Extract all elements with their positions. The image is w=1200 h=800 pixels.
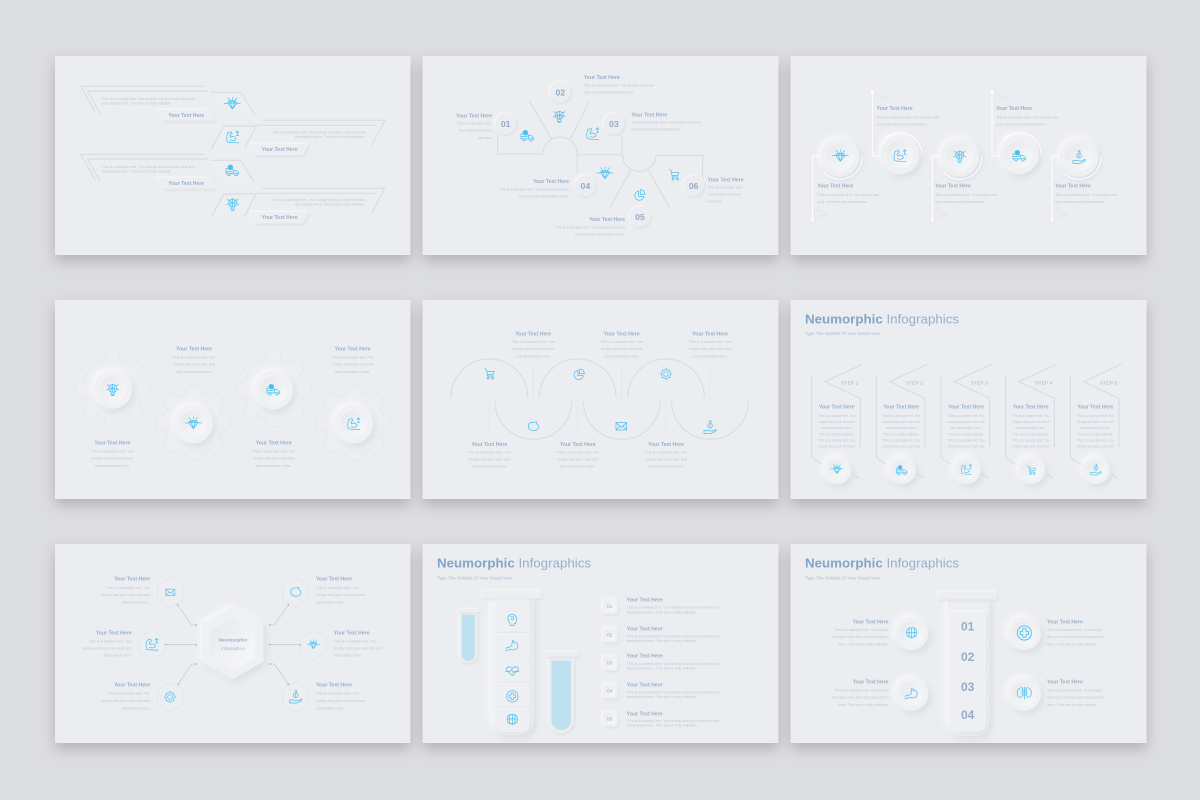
hub text: simply add your own text and bbox=[101, 593, 150, 597]
side text: Your Text Here bbox=[1047, 619, 1083, 625]
wave text: simply add your own text bbox=[469, 457, 511, 461]
card 8 bbox=[422, 544, 778, 743]
hub text: This is a sample text. You bbox=[316, 692, 359, 696]
fan text bbox=[456, 75, 744, 237]
fan text: You simply add your bbox=[708, 193, 742, 197]
centre hexagon: Infographics bbox=[221, 646, 245, 651]
fan text: You simply add your bbox=[458, 129, 493, 133]
list text: This is a sample text. You simply add your own text and bbox=[627, 634, 720, 638]
content 3 bbox=[811, 90, 1117, 221]
step text 3: This is a sample text. You bbox=[947, 439, 985, 443]
card 9 bbox=[790, 544, 1146, 743]
panel: slanted list bbox=[55, 56, 410, 255]
timeline text: This is a sample text. You simply add bbox=[1055, 193, 1117, 197]
wave arcs bbox=[451, 359, 748, 439]
step labels: STEP 4 bbox=[1035, 381, 1053, 387]
step text 2: simply add your own text bbox=[883, 445, 920, 449]
step text 3: Your Text Here bbox=[948, 405, 984, 411]
step text 4: simply add your own text bbox=[1012, 420, 1049, 424]
content 1 bbox=[81, 86, 385, 223]
fan text: own text bbox=[708, 200, 723, 204]
list text: This is a sample text. You simply add your own text and bbox=[627, 690, 720, 694]
wave text: and description here. bbox=[604, 354, 639, 358]
hub text: simply add your own text and bbox=[316, 593, 365, 597]
number boxes bbox=[603, 599, 617, 726]
gear text: This is a sample text. You bbox=[91, 450, 134, 454]
gear text: Your Text Here bbox=[256, 440, 292, 446]
hub text: Your Text Here bbox=[316, 577, 352, 583]
number boxes: 03 bbox=[607, 661, 613, 667]
step text 2: Your Text Here bbox=[883, 405, 919, 411]
badges: 04 bbox=[581, 181, 590, 191]
list text: This is a sample text. You simply add your own text and bbox=[627, 662, 720, 666]
gear shapes bbox=[75, 352, 391, 461]
wave text: Your Text Here bbox=[560, 442, 596, 448]
badges: 05 bbox=[635, 212, 645, 222]
side text: here. This text is fully editable. bbox=[1047, 703, 1098, 707]
fan icons bbox=[521, 111, 679, 200]
step text 5: simply add your own text bbox=[1077, 445, 1114, 449]
side text: here. This text is fully editable. bbox=[838, 703, 889, 707]
fan text: This is a sample text. You simply add your bbox=[584, 83, 655, 87]
fan text: own text and description here. bbox=[575, 233, 625, 237]
step text 4: Your Text Here bbox=[1013, 405, 1049, 411]
heading 8: Neumorphic Infographics bbox=[437, 555, 591, 570]
step text 2: simply add your own text bbox=[883, 420, 920, 424]
panel: gears bbox=[55, 300, 410, 499]
step labels: STEP 3 bbox=[971, 381, 988, 387]
tube with numbers: 03 bbox=[961, 680, 975, 694]
card 4 bbox=[55, 300, 410, 499]
step labels: STEP 2 bbox=[906, 381, 923, 387]
fan text: own text and description here. bbox=[519, 195, 569, 199]
side text bbox=[832, 619, 1104, 707]
badges: 03 bbox=[609, 119, 619, 129]
timeline text bbox=[817, 106, 1117, 204]
step buttons bbox=[824, 457, 1118, 484]
timeline text: This is a sample text. You simply add bbox=[817, 193, 879, 197]
card 3 bbox=[790, 56, 1146, 255]
row 4: Your Text Here bbox=[262, 215, 298, 221]
step text 2: This text is fully editable. bbox=[883, 432, 920, 436]
hub text: simply add your own text and bbox=[83, 646, 132, 650]
step text 5: Your Text Here bbox=[1077, 405, 1113, 411]
wave text: This is a sample text. You bbox=[468, 450, 511, 454]
fan text: Your Text Here bbox=[533, 179, 569, 185]
wave text: Your Text Here bbox=[471, 442, 507, 448]
side text: This is a sample text. You simply bbox=[834, 689, 889, 693]
panel: numbered tube bbox=[790, 544, 1146, 743]
gear text bbox=[91, 346, 374, 468]
badges: 01 bbox=[501, 119, 511, 129]
timeline text: Your Text Here bbox=[817, 184, 853, 190]
hub text: This is a sample text. You bbox=[107, 586, 150, 590]
content 5 bbox=[451, 332, 748, 469]
gear text: simply add your own text bbox=[332, 363, 374, 367]
step labels: STEP 5 bbox=[1100, 381, 1117, 387]
heading 8: Type The Subtitle Of Your Great Here bbox=[437, 575, 512, 580]
list text: description here. This text is fully editable. bbox=[627, 695, 697, 699]
step text 3: and description here. bbox=[950, 426, 982, 430]
list text: Your Text Here bbox=[627, 654, 663, 660]
panel: circle timeline bbox=[790, 56, 1146, 255]
row 1: description here. This text is fully editable. bbox=[102, 102, 172, 106]
hub text: simply add your own text and bbox=[334, 646, 383, 650]
step text 5: This is a sample text. You bbox=[1076, 439, 1114, 443]
timeline text: your own text and description bbox=[935, 200, 984, 204]
side text: add your own text and description bbox=[1047, 635, 1104, 639]
step text 1: This is a sample text. You bbox=[818, 439, 856, 443]
timeline text: This is a sample text. You simply add bbox=[996, 115, 1058, 119]
card 5 bbox=[422, 300, 778, 499]
fan outline bbox=[498, 102, 703, 207]
row 1: Your Text Here bbox=[168, 113, 204, 119]
wave text: simply add your own text bbox=[513, 347, 555, 351]
side text: here. This text is fully editable. bbox=[838, 642, 889, 646]
wave text: This is a sample text. You bbox=[689, 340, 731, 344]
side text: add your own text and description bbox=[832, 635, 889, 639]
hub text: description here. bbox=[334, 654, 362, 658]
step text 3: simply add your own text bbox=[948, 420, 984, 424]
hub text: This is a sample text. You bbox=[89, 639, 132, 643]
card 6 bbox=[790, 300, 1146, 499]
wave text: Your Text Here bbox=[648, 442, 684, 448]
list text: description here. This text is fully editable. bbox=[627, 639, 697, 643]
timeline text: Your Text Here bbox=[877, 106, 913, 112]
centre hexagon bbox=[203, 607, 263, 679]
gear text: simply add your own text bbox=[173, 363, 216, 367]
list text: Your Text Here bbox=[627, 598, 663, 604]
wave text: Your Text Here bbox=[692, 332, 728, 338]
number boxes: 04 bbox=[607, 689, 613, 695]
fan text: This is a sample text bbox=[708, 186, 743, 190]
panel: hexagon hub bbox=[55, 544, 410, 743]
hub text: Your Text Here bbox=[334, 630, 370, 636]
list text: description here. This text is fully editable. bbox=[627, 610, 697, 614]
step text 1: simply add your own text bbox=[818, 445, 855, 449]
row 3: This is a sample text. You simply add your own text and bbox=[102, 165, 195, 169]
timeline text: This is a sample text. You simply add bbox=[935, 193, 997, 197]
wave text: This is a sample text. You bbox=[512, 340, 555, 344]
step text 1: and description here. bbox=[821, 426, 852, 430]
gear text: and description here. bbox=[335, 370, 370, 374]
badges: 06 bbox=[689, 181, 699, 191]
fan text: Your Text Here bbox=[708, 177, 744, 183]
row 3: Your Text Here bbox=[168, 181, 204, 187]
content 6 bbox=[805, 311, 1121, 484]
side text: Your Text Here bbox=[853, 619, 889, 625]
centre hexagon: Neumorphic bbox=[218, 638, 248, 644]
row 1 bbox=[81, 86, 254, 121]
gear text: Your Text Here bbox=[176, 346, 212, 352]
right tube bbox=[545, 652, 579, 733]
side text: This is a sample text. You simply bbox=[1047, 689, 1102, 693]
wave text: and description here. bbox=[692, 354, 728, 358]
number boxes: 01 bbox=[607, 604, 613, 610]
side text: This is a sample text. You simply bbox=[834, 628, 889, 632]
number boxes: 05 bbox=[607, 717, 613, 723]
content 2 bbox=[456, 75, 744, 237]
row 2: This is a sample text. You simply add your own text and bbox=[272, 130, 365, 134]
fan text: own text and description here. bbox=[631, 128, 682, 132]
hub text: This is a sample text. You bbox=[316, 586, 359, 590]
step text 1: This text is fully editable. bbox=[819, 432, 855, 436]
wave text: This is a sample text. You bbox=[645, 450, 687, 454]
hub text: Your Text Here bbox=[96, 630, 132, 636]
timeline text: Your Text Here bbox=[1055, 184, 1091, 190]
row 4: This is a sample text. You simply add your own text and bbox=[272, 198, 365, 202]
side text: add your own text and description bbox=[832, 696, 889, 700]
wave text: simply add your own text bbox=[557, 457, 599, 461]
connector lines bbox=[489, 367, 710, 432]
main tube bbox=[483, 591, 542, 735]
fan text: Your Text Here bbox=[456, 114, 492, 120]
wave text: This is a sample text. You bbox=[600, 340, 643, 344]
panel: wave bbox=[422, 300, 778, 499]
row 2 bbox=[212, 120, 385, 155]
gear text: This is a sample text. You bbox=[173, 356, 215, 360]
side text: here. This text is fully editable. bbox=[1047, 642, 1098, 646]
gear text: and description here. bbox=[95, 464, 130, 468]
wave text: and description here. bbox=[648, 465, 684, 469]
gear buttons bbox=[93, 370, 373, 443]
timeline text: your own text and description bbox=[877, 123, 926, 127]
tube with numbers: 04 bbox=[961, 708, 975, 722]
step text 2: and description here. bbox=[886, 426, 917, 430]
step text 2 bbox=[882, 405, 920, 449]
list text: This is a sample text. You simply add your own text and bbox=[627, 719, 720, 723]
gear text: and description here. bbox=[176, 370, 212, 374]
wave icons bbox=[485, 369, 716, 433]
fan text: Your Text Here bbox=[631, 112, 667, 118]
gear text: Your Text Here bbox=[335, 346, 371, 352]
card 7 bbox=[55, 544, 410, 743]
content 4 bbox=[75, 346, 391, 468]
hub text: This is a sample text. You bbox=[107, 692, 150, 696]
wave text bbox=[468, 332, 732, 469]
connector arrows bbox=[165, 604, 301, 685]
heading 9: Type The Subtitle Of Your Great Here bbox=[805, 575, 880, 580]
fan text: This is a sample text. bbox=[456, 122, 492, 126]
satellite hexagons bbox=[139, 578, 326, 712]
gear text: and description here. bbox=[256, 464, 291, 468]
step labels: STEP 1 bbox=[841, 381, 859, 387]
list text: description here. This text is fully editable. bbox=[627, 667, 697, 671]
badges: 02 bbox=[556, 87, 565, 97]
step text 4: This text is fully editable. bbox=[1013, 432, 1049, 436]
panel: steps bbox=[790, 300, 1146, 499]
step text 5: This is a sample text. You bbox=[1076, 414, 1114, 418]
side text: Your Text Here bbox=[853, 680, 889, 686]
tube with numbers bbox=[938, 592, 997, 736]
step text 4: This is a sample text. You bbox=[1012, 414, 1050, 418]
heading 9: Neumorphic Infographics bbox=[805, 555, 959, 570]
list text: Your Text Here bbox=[627, 711, 663, 717]
hub text: description here. bbox=[122, 706, 150, 710]
number boxes: 02 bbox=[607, 633, 613, 639]
card 1 bbox=[55, 56, 410, 255]
wave text: and description here. bbox=[472, 465, 507, 469]
content 7 bbox=[83, 577, 383, 712]
step text 2: This is a sample text. You bbox=[882, 439, 920, 443]
hub text: description here. bbox=[316, 706, 344, 710]
gear text: This is a sample text. You bbox=[331, 356, 374, 360]
hub text: simply add your own text and bbox=[316, 699, 365, 703]
badges bbox=[495, 82, 704, 227]
wave text: simply add your own text bbox=[645, 457, 688, 461]
wave text: Your Text Here bbox=[604, 332, 640, 338]
hub text: This is a sample text. You bbox=[334, 639, 377, 643]
step columns outlines bbox=[812, 364, 1121, 465]
step text 5 bbox=[1076, 405, 1114, 449]
gear text: simply add your own text bbox=[253, 457, 295, 461]
row 2: Your Text Here bbox=[262, 147, 298, 153]
gear text: Your Text Here bbox=[94, 440, 130, 446]
hub text: description here. bbox=[316, 600, 344, 604]
list text bbox=[627, 598, 720, 728]
step text 5: simply add your own text bbox=[1077, 420, 1114, 424]
list text: This is a sample text. You simply add your own text and bbox=[627, 606, 720, 610]
row 3 bbox=[81, 154, 254, 189]
fan text: This is a sample text. You simply add your bbox=[499, 188, 570, 192]
flag poles bbox=[811, 90, 1067, 221]
timeline text: Your Text Here bbox=[935, 184, 971, 190]
hub text: simply add your own text and bbox=[101, 699, 150, 703]
small left tube bbox=[458, 609, 479, 663]
heading 8 bbox=[437, 555, 591, 580]
hub text: Your Text Here bbox=[114, 577, 150, 583]
hub text bbox=[83, 577, 383, 710]
wave text: and description here. bbox=[560, 465, 595, 469]
list text: Your Text Here bbox=[627, 683, 663, 689]
heading 9 bbox=[805, 555, 959, 580]
step text 4: and description here. bbox=[1015, 426, 1046, 430]
side text: This is a sample text. You simply bbox=[1047, 628, 1102, 632]
timeline text: your own text and description bbox=[996, 123, 1045, 127]
step text 3 bbox=[947, 405, 985, 449]
row 3: description here. This text is fully editable. bbox=[102, 170, 172, 174]
timeline text: This is a sample text. You simply add bbox=[877, 115, 939, 119]
hub text: Your Text Here bbox=[114, 683, 150, 689]
side text: Your Text Here bbox=[1047, 680, 1083, 686]
wave text: simply add your own text bbox=[689, 347, 732, 351]
wave text: Your Text Here bbox=[515, 332, 551, 338]
step text 4: This is a sample text. You bbox=[1012, 439, 1050, 443]
row 4 bbox=[212, 188, 385, 223]
step text 5: This text is fully editable. bbox=[1077, 432, 1114, 436]
timeline text: Your Text Here bbox=[996, 106, 1032, 112]
list text: description here. This text is fully editable. bbox=[627, 724, 697, 728]
step text 3: simply add your own text bbox=[948, 445, 984, 449]
timeline text: your own text and description bbox=[1055, 200, 1104, 204]
step text 1: Your Text Here bbox=[819, 405, 855, 411]
step text 4 bbox=[1012, 405, 1050, 449]
row 4: description here. This text is fully editable. bbox=[295, 203, 365, 207]
heading 6: Neumorphic Infographics bbox=[805, 311, 959, 326]
step text 4: simply add your own text bbox=[1012, 445, 1049, 449]
content 9 bbox=[805, 555, 1104, 736]
side text: add your own text and description bbox=[1047, 696, 1104, 700]
panel: numbered fan bbox=[422, 56, 778, 255]
heading 6: Type The Subtitle Of Your Great Here bbox=[805, 331, 880, 336]
row 2: description here. This text is fully editable. bbox=[295, 135, 365, 139]
step text 1: simply add your own text bbox=[818, 420, 855, 424]
tube with numbers: 01 bbox=[961, 620, 975, 634]
wave text: simply add your own text bbox=[601, 347, 643, 351]
side buttons bbox=[895, 617, 1041, 711]
fan text: This is a sample text. You simply add your bbox=[555, 226, 626, 230]
hub text: description here. bbox=[122, 600, 150, 604]
heading 6 bbox=[805, 311, 959, 336]
fan text: own text and description here. bbox=[584, 90, 634, 94]
gear text: This is a sample text. You bbox=[252, 450, 295, 454]
fan text: Your Text Here bbox=[584, 75, 620, 81]
wave text: and description here. bbox=[516, 354, 551, 358]
wave text: This is a sample text. You bbox=[556, 450, 599, 454]
step text 5: and description here. bbox=[1080, 426, 1111, 430]
gear text: simply add your own text bbox=[92, 457, 134, 461]
row 1: This is a sample text. You simply add your own text and bbox=[102, 97, 195, 101]
step text 3: This text is fully editable. bbox=[948, 432, 984, 436]
fan text: This is a sample text. You simply add your bbox=[631, 121, 702, 125]
tube with numbers: 02 bbox=[961, 650, 975, 664]
step text 1: This is a sample text. You bbox=[818, 414, 856, 418]
step text 2: This is a sample text. You bbox=[882, 414, 920, 418]
hub text: description here. bbox=[104, 654, 132, 658]
content 8 bbox=[437, 555, 720, 735]
list text: Your Text Here bbox=[627, 626, 663, 632]
step labels bbox=[841, 381, 1117, 387]
step text 1 bbox=[818, 405, 856, 449]
circle buttons bbox=[821, 133, 1101, 179]
fan text: own text bbox=[478, 136, 493, 140]
step text 3: This is a sample text. You bbox=[947, 414, 985, 418]
fan text: Your Text Here bbox=[589, 217, 625, 223]
panel: test tubes bbox=[422, 544, 778, 743]
hub text: Your Text Here bbox=[316, 683, 352, 689]
timeline text: your own text and description bbox=[817, 200, 867, 204]
card 2 bbox=[422, 56, 778, 255]
